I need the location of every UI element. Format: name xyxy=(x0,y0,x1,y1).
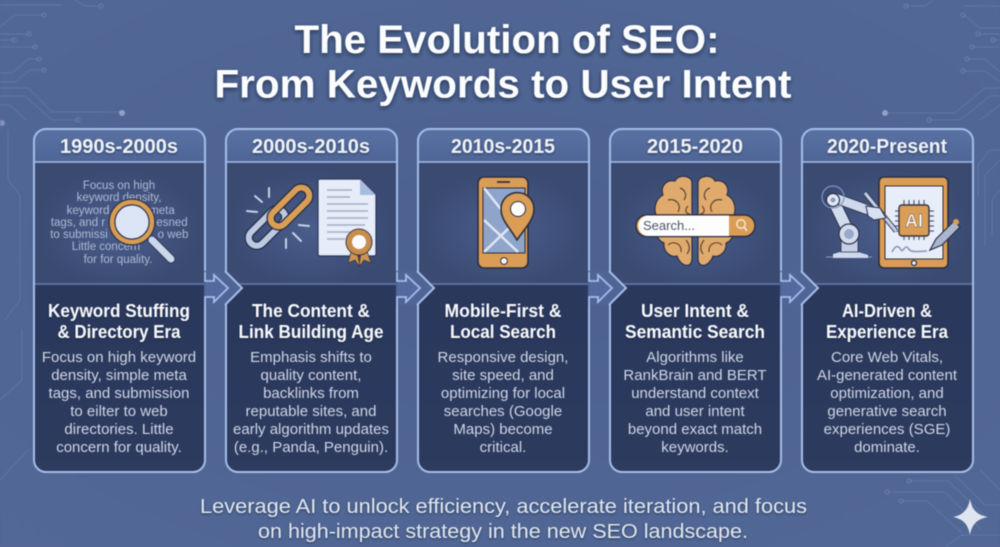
date label: 2015-2020 xyxy=(647,136,743,158)
date label: 1990s-2000s xyxy=(60,136,178,158)
panel: 2015-2020 xyxy=(610,129,781,472)
body text: AI-generated content xyxy=(817,367,958,384)
body text: quality content, xyxy=(261,367,361,384)
body text: backlinks from xyxy=(263,385,359,402)
icon: magnifier over text: o web xyxy=(158,229,188,241)
heading: Keyword Stuffing xyxy=(48,301,190,321)
footer message: on high-impact strategy in the new SEO landscape. xyxy=(258,520,748,543)
body text: Core Web Vitals, xyxy=(831,349,943,366)
icon: magnifier over text: to submissi xyxy=(50,229,108,241)
heading: Experience Era xyxy=(826,322,949,342)
body text: to eilter to web xyxy=(70,403,168,420)
heading: Mobile-First & xyxy=(444,301,562,321)
body text: experiences (SGE) xyxy=(824,421,950,438)
heading: User Intent & xyxy=(641,301,749,321)
body text: Algorithms like xyxy=(646,349,744,366)
arrow: 2 to 3 xyxy=(396,271,434,306)
icon: tablet with AI chip: AI xyxy=(905,211,923,231)
body text xyxy=(623,349,767,456)
icon: magnifier over text: Little concern xyxy=(72,241,140,253)
body text: and user intent xyxy=(645,403,745,420)
icon: magnifier over text: Focus on high xyxy=(83,180,155,192)
body text: concern for quality. xyxy=(56,439,182,456)
icon: certificate document xyxy=(318,179,376,266)
heading: The Content & xyxy=(252,301,370,321)
heading: Semantic Search xyxy=(625,322,765,342)
icon: magnifier over text: meta xyxy=(149,205,175,217)
body text: keywords. xyxy=(661,439,729,456)
heading: Local Search xyxy=(450,322,556,342)
body text xyxy=(233,349,389,456)
panel: 2020-Present xyxy=(802,129,973,472)
icon: chain link xyxy=(245,184,313,249)
body text: directories. Little xyxy=(64,421,174,438)
date label: 2020-Present xyxy=(827,136,947,158)
body text: critical. xyxy=(480,439,526,456)
body text xyxy=(438,349,568,456)
arrow: 4 to 5 xyxy=(780,271,818,306)
footer message: Leverage AI to unlock efficiency, accelerate iteration, and focus xyxy=(200,495,807,518)
heading xyxy=(48,301,190,342)
body text: reputable sites, and xyxy=(246,403,376,420)
body text: optimization, and xyxy=(830,385,944,402)
footer message xyxy=(200,495,807,543)
arrow: 3 to 4 xyxy=(588,271,626,306)
body text xyxy=(817,349,958,456)
title xyxy=(214,18,792,106)
body text: Focus on high keyword xyxy=(42,349,196,366)
heading: AI-Driven & xyxy=(842,301,932,321)
body text: early algorithm updates xyxy=(233,421,389,438)
icon: phone with map pin xyxy=(478,177,534,268)
circuit pattern: top left xyxy=(0,0,125,480)
body text: site speed, and xyxy=(452,367,554,384)
icon: sparkle star xyxy=(953,499,988,535)
body text: searches (Google xyxy=(444,403,562,420)
body text: Responsive design, xyxy=(438,349,568,366)
icon: magnifier over text: esned xyxy=(156,217,188,229)
heading xyxy=(826,301,949,342)
body text: density, simple meta xyxy=(51,367,187,384)
heading xyxy=(625,301,765,342)
body text: understand context xyxy=(631,385,760,402)
body text: Emphasis shifts to xyxy=(250,349,372,366)
icon: magnifier over text xyxy=(50,180,188,266)
body text: Maps) become xyxy=(453,421,553,438)
body text xyxy=(42,349,196,456)
circuit pattern: bottom right xyxy=(885,470,1000,547)
icon: magnifier over text: keyword xyxy=(67,205,109,217)
body text: (e.g., Panda, Penguin). xyxy=(234,439,388,456)
body text: dominate. xyxy=(854,439,920,456)
heading: & Directory Era xyxy=(58,322,181,342)
body text: RankBrain and BERT xyxy=(623,367,767,384)
icon: tablet with AI chip xyxy=(879,177,960,268)
body text: optimizing for local xyxy=(441,385,565,402)
title: From Keywords to User Intent xyxy=(214,62,792,106)
date label: 2000s-2010s xyxy=(252,136,370,158)
icon: robot arm xyxy=(822,186,896,258)
heading xyxy=(444,301,562,342)
icon: magnifier over text: tags, and r xyxy=(51,217,105,229)
icon: brain with search bar: Search... xyxy=(643,218,695,233)
panel: 2010s-2015 xyxy=(418,129,589,472)
arrow: 1 to 2 xyxy=(204,271,242,306)
panel: 2000s-2010s xyxy=(226,129,397,472)
body text: beyond exact match xyxy=(628,421,762,438)
icon: magnifier over text: keyword density, xyxy=(77,192,161,204)
body text: tags, and submission xyxy=(49,385,189,402)
body text: generative search xyxy=(827,403,947,420)
circuit pattern: top right xyxy=(882,0,1000,245)
title: The Evolution of SEO: xyxy=(294,18,720,62)
date label: 2010s-2015 xyxy=(451,136,555,158)
panel: 1990s-2000s xyxy=(34,129,205,472)
icon: magnifier over text: for for quality. xyxy=(84,254,152,266)
heading xyxy=(238,301,384,342)
heading: Link Building Age xyxy=(238,322,384,342)
icon: brain with search bar xyxy=(636,176,755,265)
